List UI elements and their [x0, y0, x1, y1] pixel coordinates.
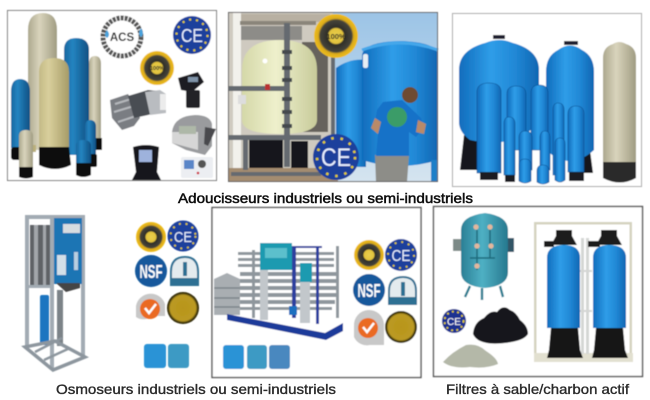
badge: ACS: ACS: [110, 32, 134, 44]
storage tank: [214, 273, 240, 315]
left blue tank: [11, 79, 33, 160]
panel: compact reverse osmosis unit: [25, 215, 85, 370]
certification badges: plant: [353, 239, 417, 345]
blue membrane housing: [40, 295, 49, 345]
badge: ACS: [103, 18, 143, 56]
base frame: [25, 341, 85, 370]
control cabinets: [260, 243, 292, 270]
badge: CE: CE: [181, 26, 203, 46]
certification badges: osmosis unit: NSF: [140, 262, 163, 282]
heading: softeners: Adoucisseurs industriels ou semi-industriels: [178, 190, 473, 206]
tall beige tank: [28, 13, 57, 150]
badge: CE: [173, 16, 211, 54]
twin tank skid: [534, 222, 633, 362]
panel: sand and carbon filters: [434, 206, 642, 376]
large front beige tank: [32, 58, 71, 169]
small beige tank: [19, 130, 33, 178]
small blue tanks: [477, 83, 584, 184]
badge: guarantee: 100%: [326, 32, 346, 41]
beige tank: [242, 40, 317, 134]
certification badges: osmosis unit: CE: [174, 229, 192, 246]
panel: blue tank range: [452, 14, 642, 186]
right beige tank: [89, 56, 102, 150]
activated carbon pile: [473, 307, 528, 344]
certification badges: plant: NSF: [358, 281, 381, 301]
rear blue tank: [336, 60, 366, 167]
CE seal: CE: [447, 317, 461, 328]
heading: reverse osmosis: Osmoseurs industriels ou semi-industriels: [56, 381, 336, 397]
small front blue tank: [76, 140, 91, 177]
badge: CE: [313, 134, 359, 180]
large blue tanks: [459, 35, 594, 173]
black valve head: [178, 72, 204, 108]
white control panel: [181, 157, 213, 178]
panel: installation with blue tanks: [228, 12, 438, 182]
panel: softener tanks and controllers: [8, 10, 216, 180]
black display controller: [132, 145, 161, 180]
blue skid: [227, 314, 343, 340]
pipe racks: [238, 246, 339, 318]
badge: guarantee: [314, 14, 358, 58]
badge: CE: CE: [321, 144, 351, 172]
beige tank: [603, 42, 636, 182]
sand pile: [443, 345, 498, 368]
control valve: [110, 90, 166, 130]
black pump bases: [249, 140, 308, 168]
tall blue tank: [64, 38, 89, 155]
panel: large reverse osmosis plant: [212, 208, 421, 378]
CE seal: [442, 309, 466, 333]
blue control cabinet: [54, 218, 82, 284]
certification badges: osmosis unit: [135, 220, 199, 368]
rear small blue tank: [85, 120, 97, 167]
certification badges: plant: CE: [392, 248, 410, 265]
heading: filters: Filtres à sable/charbon actif: [446, 381, 629, 397]
grey controller: [172, 115, 216, 155]
large blue tank: [362, 41, 438, 166]
badge: guarantee: [140, 51, 174, 85]
feature icons: [223, 345, 290, 369]
badge: guarantee: 100%: [150, 66, 164, 72]
teal pressure filter: [453, 213, 514, 300]
pipework: [229, 20, 335, 176]
technician: [371, 87, 426, 182]
